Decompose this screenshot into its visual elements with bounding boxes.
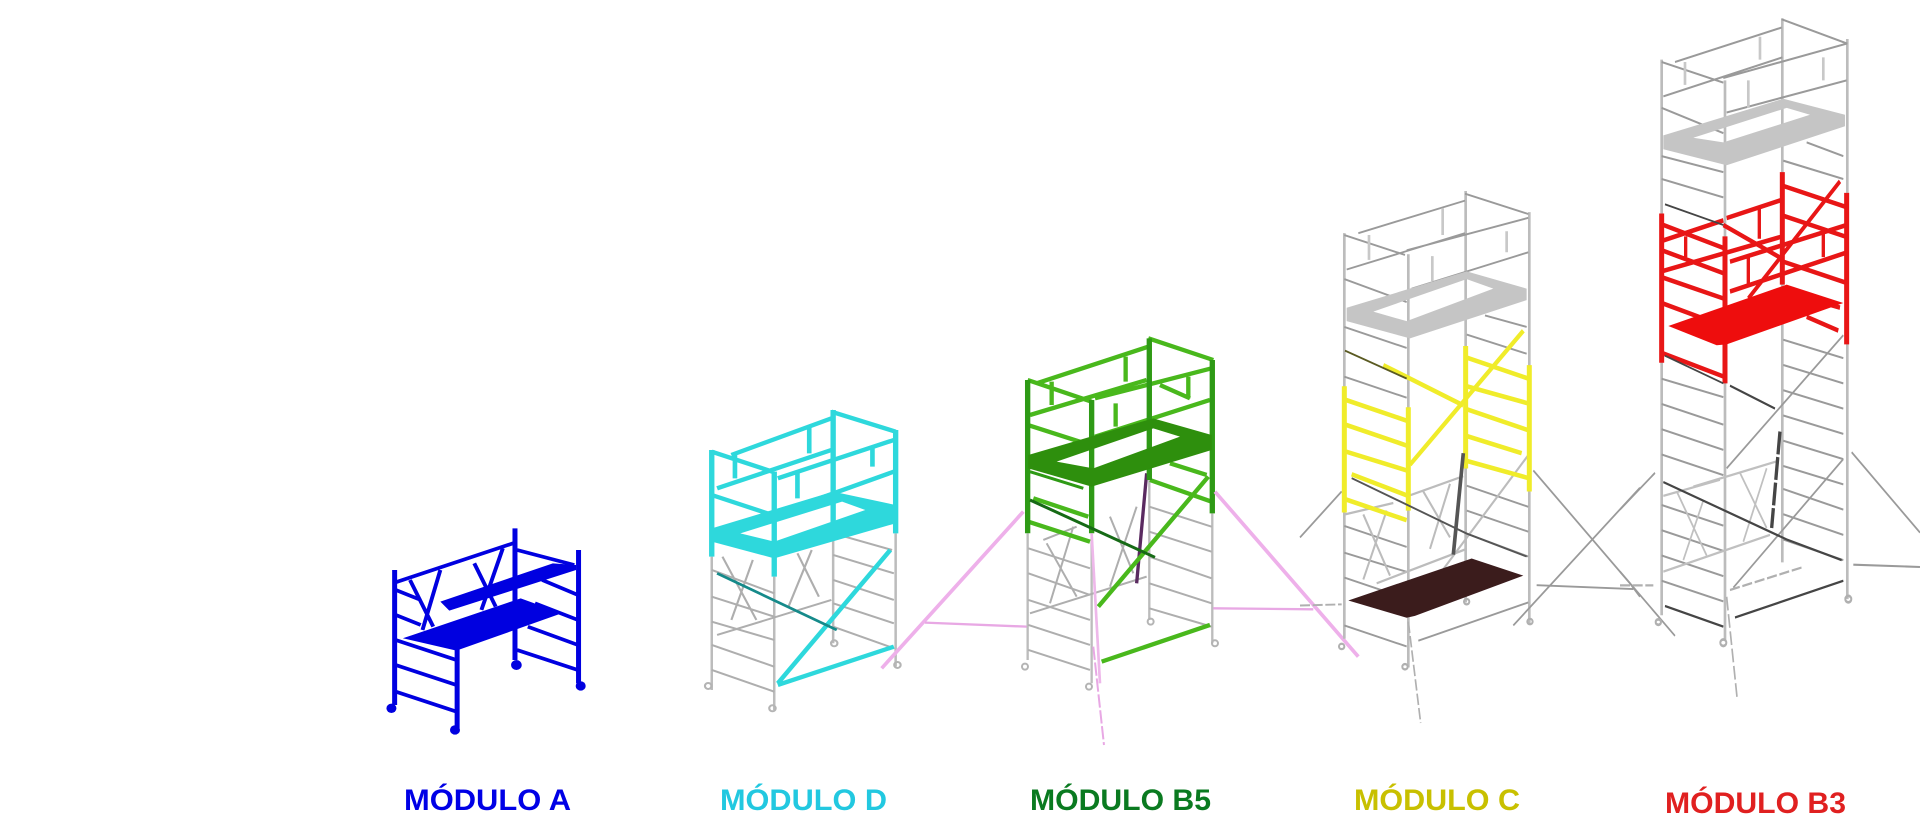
outriggers: módulo B5 <box>882 492 1358 745</box>
scaffold: módulo C <box>1300 191 1640 723</box>
scaffold: módulo B3 <box>1620 18 1920 700</box>
label: módulo B3: MÓDULO B3 <box>1665 786 1846 820</box>
label: módulo C: MÓDULO C <box>1354 783 1520 817</box>
label: módulo B5: MÓDULO B5 <box>1030 783 1211 817</box>
scaffold: módulo B5 <box>1022 338 1218 690</box>
label: módulo A: MÓDULO A <box>404 783 571 817</box>
scaffold: módulo A <box>386 528 586 735</box>
label: módulo D: MÓDULO D <box>720 783 887 817</box>
scaffold: módulo D <box>705 410 901 711</box>
